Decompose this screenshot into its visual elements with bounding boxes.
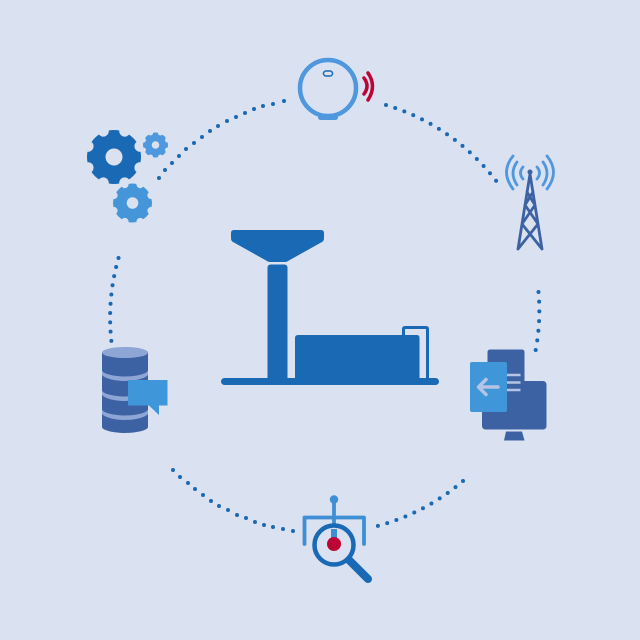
icon: database with chat [102,347,168,433]
dotted arc: bottom right [378,481,463,526]
magnifier lens [314,526,354,564]
mast tip [528,170,532,174]
radio waves [506,156,554,189]
monitor [482,381,546,430]
icon: inspection magnifier [304,495,368,579]
small gear [140,130,171,160]
tower head [231,230,324,262]
sensor ring [300,60,356,116]
probe inside lens [331,529,337,541]
signal waves [364,73,372,100]
dotted arc: right [536,292,539,351]
icon: smart sensor globe [300,60,372,120]
dotted arc: bottom left [171,468,295,533]
tower column [268,264,288,382]
dotted arc: top left [157,99,286,180]
database stack [102,347,148,433]
sensor indicator [324,71,332,76]
probe head [330,495,338,504]
tank [295,335,420,382]
tank pipe [404,328,428,380]
icon: devices transfer [470,350,546,440]
dotted arc: left [110,258,118,342]
red target [327,537,341,551]
bracket [304,518,364,544]
chat bubble [128,380,168,415]
icon: radio tower [506,156,554,249]
large gear [81,124,147,190]
sensor base [318,113,338,120]
ground line [221,378,439,385]
probe stem [332,500,336,528]
document panel [470,362,507,412]
left arrow [478,380,498,394]
central illustration: water tower and tank [221,230,439,385]
medium gear [109,179,156,227]
text lines [506,375,520,390]
lattice mast [518,174,542,249]
tablet [488,350,524,400]
icon: gears [81,124,171,227]
dotted ring [110,99,539,533]
magnifier handle [349,560,368,579]
dotted arc: top right [386,105,497,182]
monitor stand [504,432,524,440]
